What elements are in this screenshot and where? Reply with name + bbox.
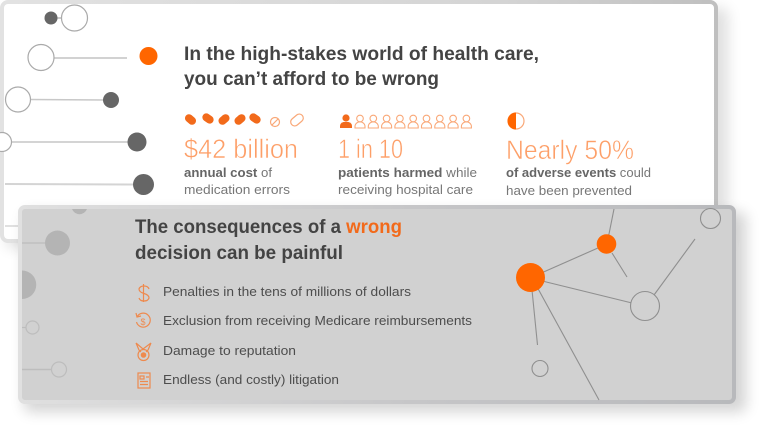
big number: Nearly 50% [506, 135, 634, 165]
list: reputation: Damage to reputation [163, 344, 296, 358]
icon: medal [136, 343, 151, 360]
list: penalties [139, 284, 411, 302]
stat: 1 in 10 [338, 114, 477, 197]
heading: consequences: decision can be painful [135, 242, 343, 264]
description: annual cost of [184, 166, 273, 180]
heading: consequences [135, 216, 402, 264]
description: patients harmed while [338, 166, 477, 180]
network graphic: left nodes [0, 5, 158, 226]
heading: consequences: The consequences of a wrong [135, 216, 402, 238]
panel: top white card [0, 2, 728, 248]
list: exclusion: Exclusion from receiving Medicare reimbursements [163, 314, 472, 328]
description: medication errors [184, 183, 290, 197]
heading: high-stakes: you can’t afford to be wrong [184, 68, 439, 90]
stat: Nearly 50% [506, 112, 651, 198]
panel: lower gray card [20, 207, 746, 412]
network graphic: right nodes [516, 208, 720, 400]
network graphic: faded left nodes [22, 209, 87, 377]
icon: dollar [139, 284, 149, 302]
big number: $42 billion [184, 134, 298, 164]
description: have been prevented [506, 184, 632, 198]
list: penalties: Penalties in the tens of millions of dollars [163, 285, 411, 299]
icon: circular dollar: $ [140, 317, 146, 327]
big number: 1 in 10 [338, 134, 403, 164]
description [506, 166, 651, 198]
description: receiving hospital care [338, 183, 473, 197]
heading: high-stakes [184, 43, 539, 90]
description [184, 166, 290, 197]
description [338, 166, 477, 197]
stat: $42 billion [183, 112, 305, 197]
heading: high-stakes: In the high-stakes world of health care, [184, 43, 539, 65]
list: reputation [136, 343, 296, 360]
list: litigation: Endless (and costly) litigation [163, 373, 339, 387]
icon: ten people [340, 114, 471, 128]
icon: half circle [508, 112, 524, 130]
icon: circular dollar [136, 313, 150, 327]
icon: document [138, 373, 150, 388]
description: of adverse events could [506, 166, 651, 180]
icon: row of pills [183, 112, 305, 128]
